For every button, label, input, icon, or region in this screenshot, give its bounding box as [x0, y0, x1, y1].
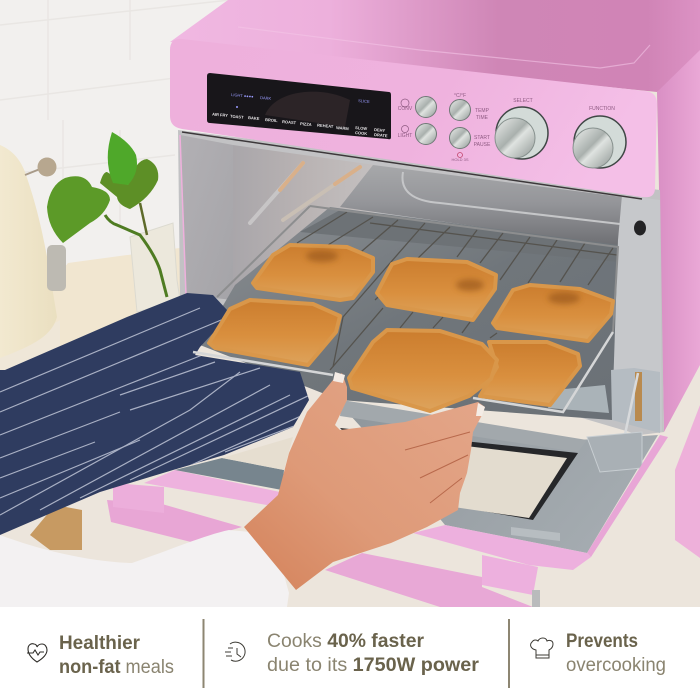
toast: rear right of front row: [480, 342, 580, 405]
icon: heart with pulse: [27, 644, 47, 662]
display: TOAST: [230, 114, 244, 120]
feature: prevents overcooking: [531, 631, 666, 676]
wire rack: [217, 206, 618, 412]
toast browning: [306, 250, 580, 304]
hand: [244, 372, 485, 590]
divider: [508, 619, 510, 688]
buttons and labels: FUNCTION: [589, 106, 615, 112]
display: REHEAT: [317, 123, 334, 129]
lower tray: [548, 385, 609, 413]
pink side unit right: [675, 405, 700, 558]
toast: back left: [253, 245, 373, 300]
divider: [202, 619, 204, 688]
function knob: [573, 116, 626, 168]
door window: [340, 428, 578, 520]
display: DARK: [260, 95, 272, 101]
floor of cavity: [200, 207, 620, 420]
rear foot bar: [325, 553, 533, 607]
upper left strip: [144, 470, 280, 507]
left leg: [113, 483, 164, 513]
inner left wall: [233, 145, 375, 300]
buttons and labels: TEMP: [475, 108, 490, 114]
feature: healthier: [27, 633, 174, 678]
open door: [107, 400, 668, 607]
oven mitt: [0, 293, 310, 535]
bottom feature strip: [0, 607, 700, 700]
display: [207, 73, 391, 139]
buttons and labels: HOLD 3S: [451, 157, 469, 162]
ledge: [340, 400, 587, 452]
small button conv: [416, 96, 436, 118]
kettle: [0, 145, 66, 358]
buttons and labels: SELECT: [513, 98, 533, 104]
display: AIR FRY: [212, 112, 228, 118]
toast: back centre: [377, 259, 496, 320]
display: ROAST: [282, 119, 297, 125]
feature: cooks faster: [225, 631, 480, 676]
back wall: [340, 165, 622, 247]
heating rods: [250, 163, 303, 223]
icon: chef hat: [531, 638, 553, 658]
buttons and labels: LIGHT: [398, 133, 412, 139]
control panel: [170, 39, 657, 199]
icon: clock: [225, 642, 245, 661]
display: BROIL: [265, 117, 278, 123]
icon: power: [458, 152, 462, 158]
display: LIGHT ●●●●: [231, 92, 254, 99]
toast: back right: [493, 285, 613, 341]
buttons and labels: [398, 93, 615, 162]
left frame: [180, 135, 233, 300]
oven right side: [657, 50, 700, 432]
display: SLOW: [355, 125, 368, 131]
toast: front centre: [349, 330, 497, 411]
wooden board: [30, 505, 82, 550]
rack front rim: [193, 352, 333, 375]
toast slices: [209, 245, 613, 411]
feature: cooks faster: due to its 1750W power: [267, 655, 480, 676]
display: SLICE: [358, 98, 370, 104]
door left frame: [175, 458, 284, 490]
small button light: [416, 124, 436, 144]
right leg: [482, 555, 538, 595]
oven top face: [170, 0, 700, 92]
small button start: [450, 128, 470, 148]
feature text: healthier: Healthier: [59, 633, 141, 654]
select knob: [495, 107, 548, 159]
plant in glass: [47, 132, 180, 312]
oven cavity frame: [178, 130, 664, 435]
display: DRATE: [374, 132, 388, 138]
silver door surface: [340, 404, 658, 553]
oven body: [170, 0, 700, 558]
right frame: [612, 195, 662, 432]
icon: light bulb: [402, 126, 408, 132]
feature text: overcooking: overcooking: [566, 655, 666, 676]
sleeve: [0, 530, 289, 607]
buttons and labels: °C/°F: [454, 93, 466, 99]
display: PIZZA: [300, 121, 312, 127]
feature text: cooks faster: Cooks 40% faster: [267, 631, 425, 652]
buttons and labels: TIME: [476, 115, 489, 121]
feature text: prevents: Prevents: [566, 631, 638, 652]
icon: conv fan: [401, 99, 409, 107]
toast: front left: [209, 300, 340, 365]
buttons and labels: CONV: [398, 106, 413, 112]
left lower bar: [107, 500, 242, 542]
display: DEHY: [374, 127, 386, 133]
cream floor seen through door: [222, 437, 293, 470]
buttons and labels: PAUSE: [474, 142, 491, 148]
small button temp: [450, 100, 470, 120]
display: WARM: [336, 125, 350, 131]
feature: healthier: non-fat meals: [59, 657, 174, 678]
buttons and labels: START: [474, 135, 490, 141]
display: COOK: [355, 130, 367, 136]
display: BAKE: [248, 115, 260, 121]
door front pink edge: [413, 525, 591, 570]
